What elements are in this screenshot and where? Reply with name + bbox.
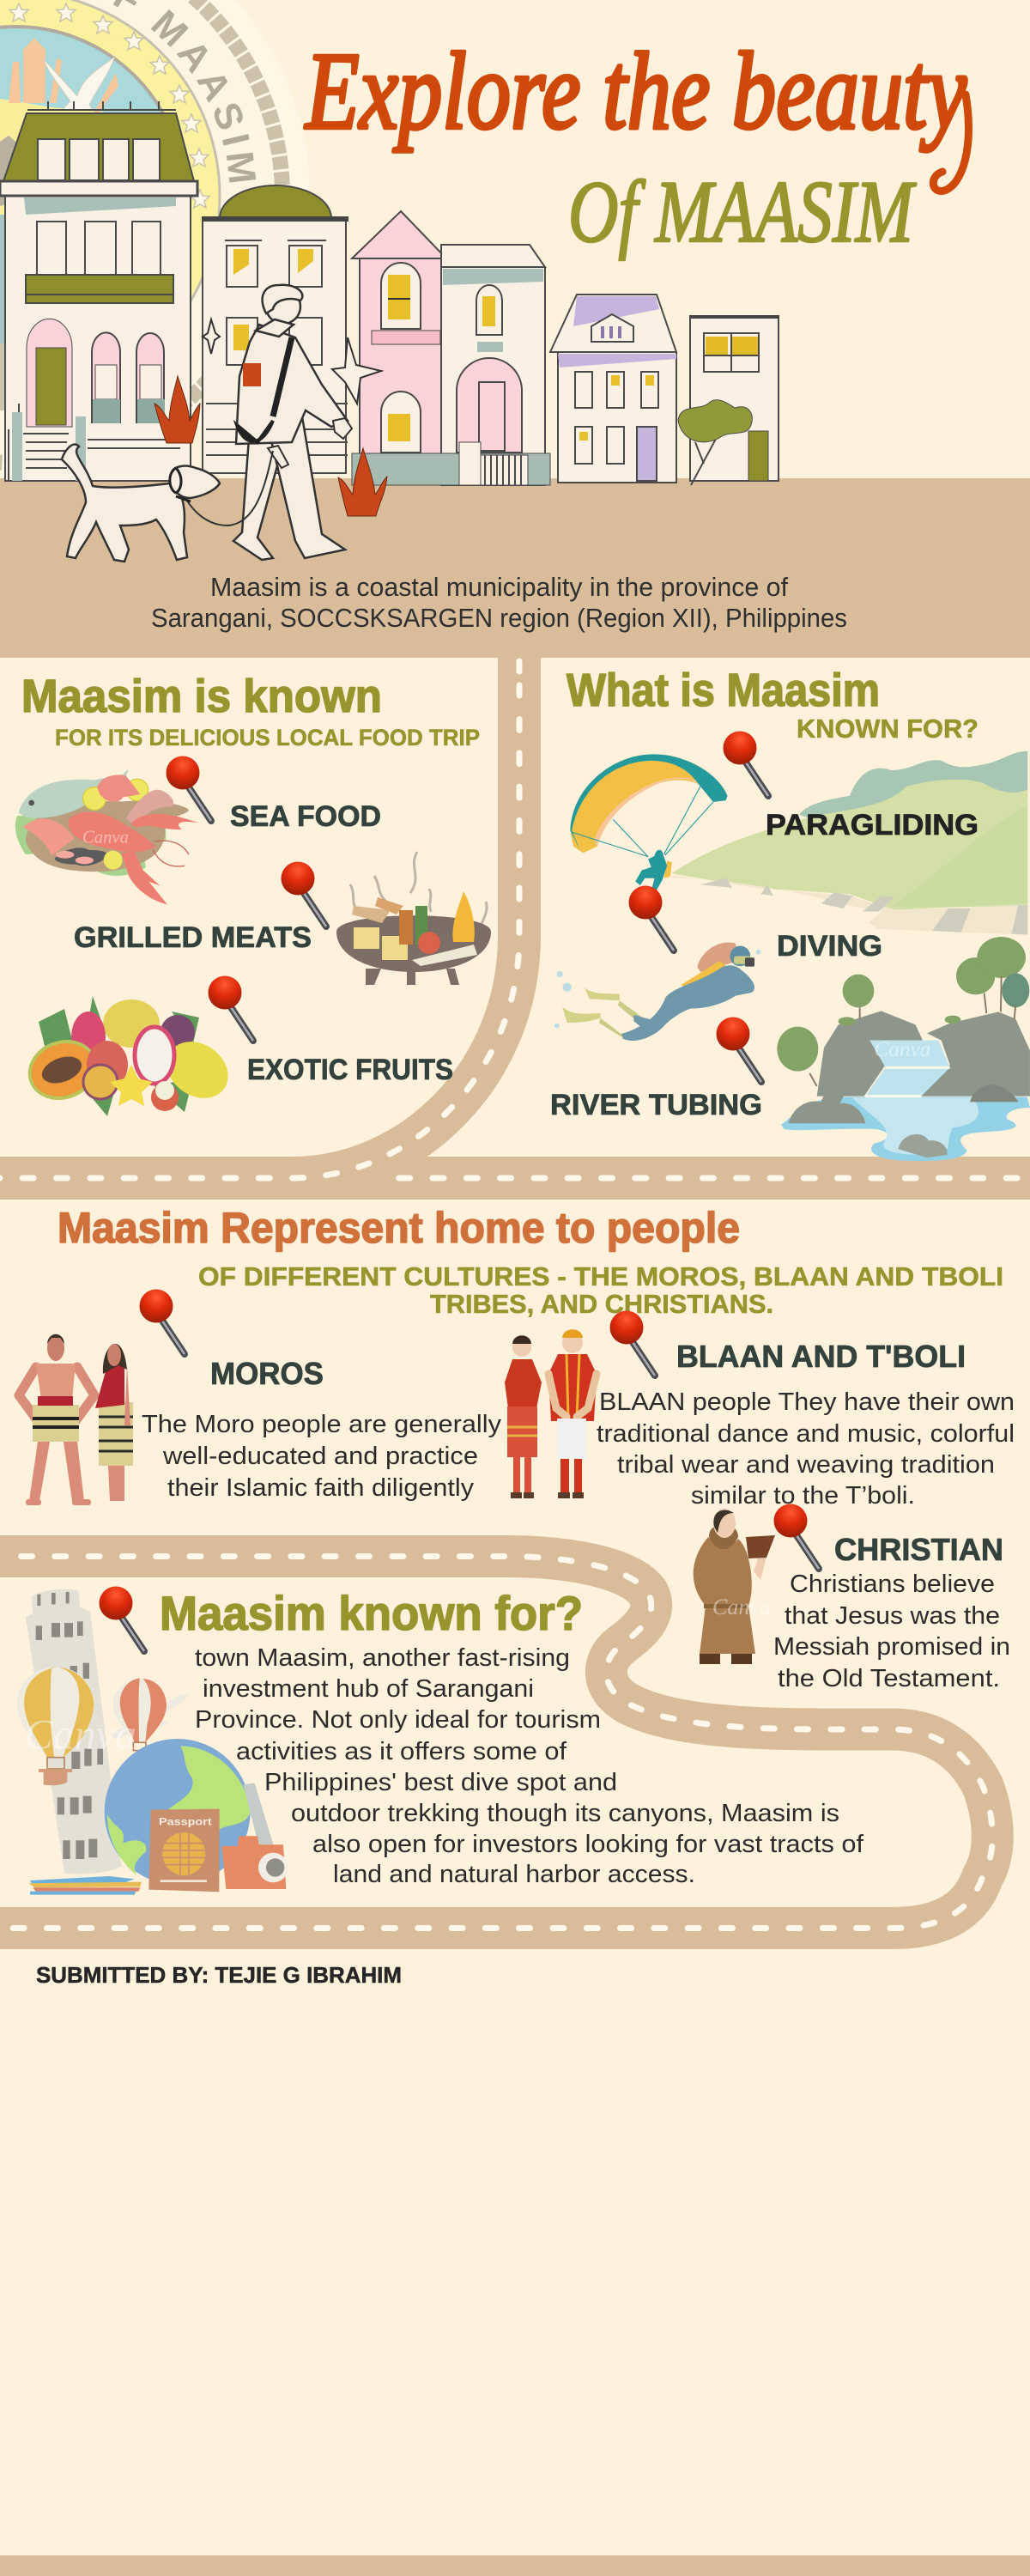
section: cultures bbox=[19, 1204, 1015, 1510]
icon: paraglider bbox=[570, 754, 728, 894]
text: Moro description: their Islamic faith diligently bbox=[167, 1474, 475, 1502]
label: paragliding: PARAGLIDING bbox=[766, 809, 978, 841]
text: Christian description: Messiah promised in bbox=[773, 1633, 1010, 1661]
building 2: domed house bbox=[202, 185, 348, 473]
text: Blaan description: similar to the T’boli. bbox=[691, 1482, 915, 1510]
subtitle: Of MAASIM bbox=[568, 163, 917, 261]
text: Maasim description: town Maasim, another fast-rising bbox=[195, 1644, 570, 1672]
text: Christian description: that Jesus was the bbox=[785, 1602, 1000, 1630]
bottom band bbox=[0, 2555, 1030, 2576]
plant left bbox=[154, 376, 200, 443]
pin bbox=[716, 1017, 761, 1082]
label: sea food: SEA FOOD bbox=[230, 800, 381, 833]
road: winding lower road bbox=[0, 1556, 992, 1929]
text: Maasim description: Philippines' best dive spot and bbox=[264, 1769, 617, 1796]
label: grilled meats: GRILLED MEATS bbox=[74, 921, 312, 954]
text: Maasim description bbox=[195, 1644, 864, 1888]
emblem: municipal seal bbox=[0, 0, 309, 478]
section: Christian bbox=[694, 1504, 1010, 1692]
dog walker bbox=[185, 285, 352, 560]
subheading: cultures bbox=[198, 1261, 1003, 1319]
text: Maasim description: outdoor trekking though its canyons, Maasim is bbox=[291, 1800, 839, 1827]
text: Maasim description: activities as it offers some of bbox=[236, 1738, 567, 1765]
text: Blaan description bbox=[597, 1388, 1015, 1510]
title swash: y descender bbox=[933, 94, 968, 191]
road: vertical into horizontal bbox=[0, 653, 1030, 1200]
text: Christian description bbox=[773, 1571, 1010, 1692]
text: Christian description: the Old Testament. bbox=[778, 1665, 1000, 1692]
credit line: SUBMITTED BY: TEJIE G IBRAHIM bbox=[36, 1962, 402, 1988]
illustration: travel collage: Canva bbox=[24, 1710, 136, 1759]
heading: Maasim known for: Maasim known for? bbox=[160, 1586, 583, 1640]
building 6: small house with tree bbox=[678, 315, 779, 485]
subheading: known for: KNOWN FOR? bbox=[797, 714, 978, 744]
text: Moro description: well-educated and practice bbox=[162, 1443, 478, 1470]
label: Moros: MOROS bbox=[210, 1356, 324, 1391]
pin bbox=[100, 1587, 144, 1651]
heading: home to people: Maasim Represent home to people bbox=[58, 1204, 740, 1252]
text: Moro description: The Moro people are generally bbox=[142, 1411, 502, 1438]
label: Blaan and T'Boli: BLAAN AND T'BOLI bbox=[676, 1339, 966, 1374]
label: Christian: CHRISTIAN bbox=[834, 1532, 1003, 1567]
pin bbox=[609, 1310, 655, 1376]
pin bbox=[282, 862, 326, 927]
pin bbox=[774, 1504, 819, 1569]
text: Maasim description: also open for investors looking for vast tracts of bbox=[312, 1831, 864, 1858]
text: Blaan description: tribal wear and weaving tradition bbox=[617, 1451, 995, 1479]
label: river tubing: RIVER TUBING bbox=[550, 1089, 762, 1121]
illustration: travel collage: Passport bbox=[159, 1815, 212, 1827]
label: diving: DIVING bbox=[777, 930, 882, 963]
section: Maasim known for bbox=[17, 1586, 864, 1895]
building 5: mansard roof house bbox=[550, 295, 676, 483]
icon: seafood platter bbox=[15, 769, 199, 904]
building 1: olive roof townhouse bbox=[0, 101, 197, 481]
figures: Blaan couple bbox=[505, 1329, 597, 1498]
building 3: pink gabled house bbox=[352, 211, 446, 468]
dog bbox=[62, 445, 220, 562]
figure: monk bbox=[694, 1509, 775, 1664]
text: Moro description bbox=[142, 1411, 502, 1502]
icon: scuba diver bbox=[554, 942, 760, 1041]
building 4: cream house with pink door bbox=[352, 245, 550, 485]
figures: Moro couple bbox=[19, 1334, 133, 1505]
text: Blaan description: BLAAN people They have their own bbox=[599, 1388, 1015, 1416]
pin bbox=[723, 732, 768, 796]
panel: activities bbox=[550, 665, 1030, 1161]
illustration: travel collage bbox=[17, 1589, 288, 1895]
panel: local food bbox=[15, 671, 491, 1116]
icon: seafood platter: Canva bbox=[82, 829, 129, 848]
illustration: green hills bbox=[669, 751, 1027, 935]
subheading: cultures: OF DIFFERENT CULTURES - THE MOROS, BLAAN AND TBOLI bbox=[198, 1261, 1003, 1291]
text: Maasim description: land and natural harbor access. bbox=[333, 1861, 695, 1888]
pin bbox=[139, 1290, 185, 1354]
text: Maasim description: investment hub of Sarangani bbox=[203, 1675, 534, 1703]
text: Christian description: Christians believe bbox=[790, 1571, 995, 1598]
street of buildings bbox=[0, 101, 779, 562]
icon: waterfall and rocks bbox=[777, 937, 1030, 1161]
star and sparkle accents bbox=[203, 319, 381, 404]
pin bbox=[208, 975, 253, 1041]
intro text: Maasim is a coastal municipality in the province of bbox=[210, 572, 788, 602]
text: Maasim description: Province. Not only ideal for tourism bbox=[195, 1706, 601, 1734]
ground band bbox=[0, 478, 1030, 658]
plant right bbox=[338, 448, 387, 516]
intro text: Sarangani, SOCCSKSARGEN region (Region XII), Philippines bbox=[151, 603, 847, 633]
text: Blaan description: traditional dance and music, colorful bbox=[597, 1420, 1015, 1448]
subheading: cultures: TRIBES, AND CHRISTIANS. bbox=[430, 1289, 773, 1319]
icon: waterfall and rocks: Canva bbox=[874, 1037, 930, 1061]
pin bbox=[628, 886, 674, 951]
pin bbox=[167, 756, 211, 821]
heading: Maasim is known: Maasim is known bbox=[21, 671, 382, 722]
intro text bbox=[151, 572, 847, 633]
subheading: food trip: FOR ITS DELICIOUS LOCAL FOOD TRIP bbox=[55, 725, 480, 750]
icon: exotic fruits bbox=[21, 996, 239, 1116]
heading: What is Maasim: What is Maasim bbox=[566, 665, 880, 716]
figure: monk: Canva bbox=[712, 1595, 771, 1619]
icon: grill bbox=[336, 852, 491, 985]
label: exotic fruits: EXOTIC FRUITS bbox=[247, 1054, 453, 1086]
